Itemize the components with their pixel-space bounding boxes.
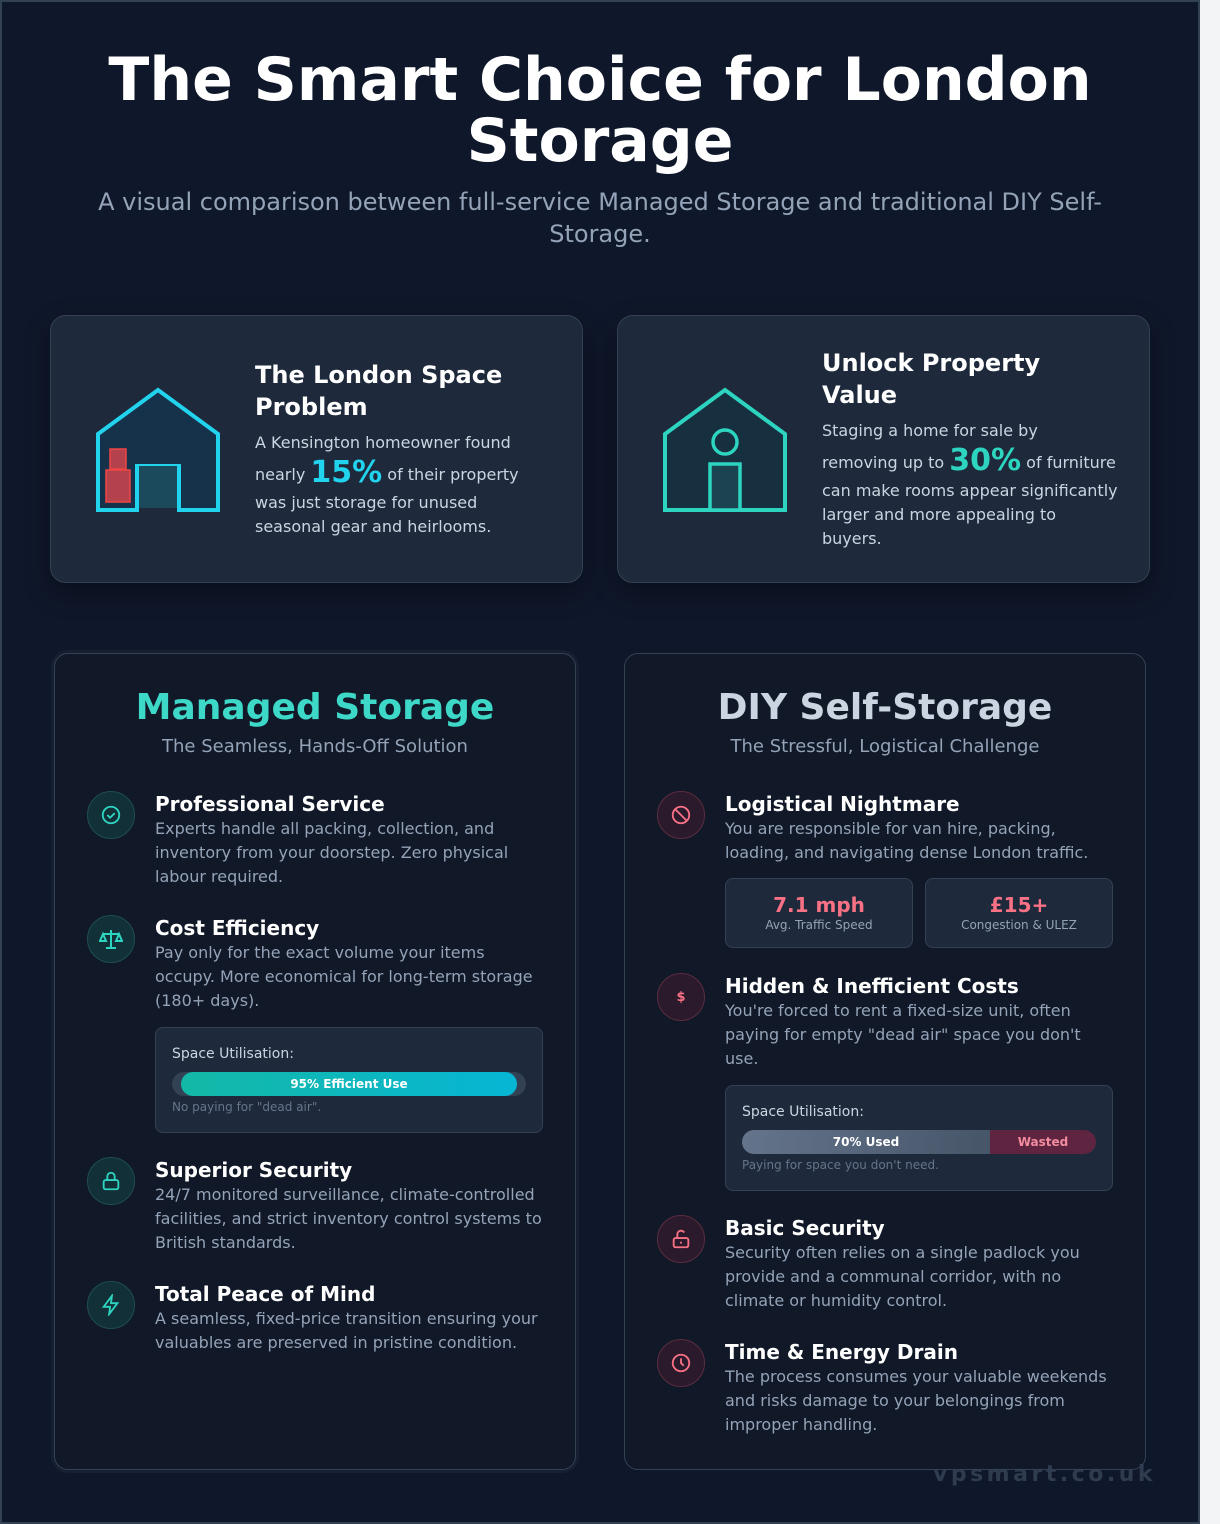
subtitle: A visual comparison between full-service Managed Storage and traditional DIY Self-Storage. [98, 188, 1102, 248]
item: basic security: Basic Security [725, 1216, 885, 1240]
item: hidden costs: Hidden & Inefficient Costs [725, 974, 1019, 998]
title: The Smart Choice for London [108, 45, 1092, 115]
icon: house with person [663, 388, 787, 512]
text: property value: Value [822, 381, 897, 409]
stat: traffic speed: 7.1 mph [773, 893, 865, 917]
item: time drain: The process consumes your valuable weekends and risks damage to your belongings from improper handling. [725, 1367, 1107, 1434]
chart: space utilisation 70%: Space Utilisation: [742, 1104, 864, 1120]
title [108, 45, 1092, 176]
tagline: The Stressful, Logistical Challenge [731, 736, 1039, 757]
item: logistical nightmare: Logistical Nightmare [725, 792, 960, 816]
text: property value: Unlock Property [822, 349, 1040, 377]
item: professional service: Professional Service [155, 792, 385, 816]
card: unlock property value [617, 315, 1150, 583]
chart: space utilisation 70%: 70% Used [833, 1135, 899, 1149]
text: space problem [255, 361, 519, 536]
item: superior security [87, 1157, 542, 1252]
item: professional service: Experts handle all packing, collection, and inventory from your doorstep. Zero physical labour required. [155, 819, 508, 886]
item: professional service [87, 791, 508, 886]
stat: traffic speed [725, 878, 913, 948]
panel: diy self-storage [624, 653, 1146, 1470]
stats boxes [725, 878, 1113, 948]
stat: traffic speed: Avg. Traffic Speed [765, 918, 873, 932]
item: basic security [657, 1215, 1080, 1310]
item: basic security: Security often relies on a single padlock you provide and a communal corridor, with no climate or humidity control. [725, 1243, 1080, 1310]
chart: space utilisation 95%: Space Utilisation: [172, 1046, 294, 1062]
icon: dollar: $ [676, 990, 686, 1004]
chart: space utilisation 95%: 95% Efficient Use [290, 1077, 408, 1091]
heading: managed storage: Managed Storage [136, 687, 494, 728]
icon: ban [657, 791, 705, 839]
chart: space utilisation 70%: Paying for space you don't need. [742, 1158, 939, 1172]
item: time drain [657, 1339, 1107, 1434]
chart: space utilisation 70%: Wasted [1018, 1135, 1068, 1149]
chart: space utilisation 95% [155, 1027, 543, 1133]
item: logistical nightmare: You are responsible for van hire, packing, loading, and navigating dense London traffic. [725, 819, 1088, 862]
item: hidden costs: You're forced to rent a fixed-size unit, often paying for empty "dead air" space you don't use. [725, 1001, 1081, 1068]
chart: space utilisation 95%: No paying for "dead air". [172, 1100, 321, 1114]
icon: lock [87, 1157, 135, 1205]
item: cost efficiency: Pay only for the exact volume your items occupy. More economical for long-term storage (180+ days). [155, 943, 533, 1010]
text: property value [822, 349, 1118, 548]
chart: space utilisation 70% [725, 1085, 1113, 1191]
item: cost efficiency: Cost Efficiency [155, 916, 319, 940]
icon: lightning [87, 1281, 135, 1329]
tagline: The Seamless, Hands-Off Solution [162, 736, 468, 757]
icon: open lock [657, 1215, 705, 1263]
item: logistical nightmare [657, 791, 1113, 948]
heading: diy: DIY Self-Storage [718, 687, 1052, 728]
icon: check [87, 791, 135, 839]
stat: congestion: £15+ [990, 893, 1048, 917]
item: hidden costs [657, 973, 1113, 1191]
text: property value: Staging a home for sale by [822, 421, 1038, 440]
icon: clock [657, 1339, 705, 1387]
title: Storage [467, 106, 733, 176]
stat: congestion: Congestion & ULEZ [961, 918, 1077, 932]
watermark: vpsmart.co.uk [933, 1462, 1156, 1487]
stat: congestion [925, 878, 1113, 948]
item: peace of mind: A seamless, fixed-price transition ensuring your valuables are preserved in pristine condition. [155, 1309, 538, 1352]
card: london space problem [50, 315, 583, 583]
item: superior security: 24/7 monitored surveillance, climate-controlled facilities, and strict inventory control systems to British standards. [155, 1185, 542, 1252]
text: space problem: The London Space Problem [255, 361, 502, 421]
item: superior security: Superior Security [155, 1158, 352, 1182]
item: cost efficiency [87, 915, 543, 1133]
item: peace of mind [87, 1281, 538, 1352]
panel: managed storage [54, 653, 576, 1470]
item: peace of mind: Total Peace of Mind [155, 1282, 375, 1306]
icon: house with boxes [96, 388, 220, 512]
icon: scales [87, 915, 135, 963]
text: space problem: A Kensington homeowner found nearly 15% of their property was just storage for unused seasonal gear and heirlooms. [255, 433, 519, 536]
icon: dollar [657, 973, 705, 1021]
text: property value: removing up to 30% of furniture can make rooms appear significantly larger and more appealing to buyers. [822, 443, 1118, 548]
item: time drain: Time & Energy Drain [725, 1340, 958, 1364]
